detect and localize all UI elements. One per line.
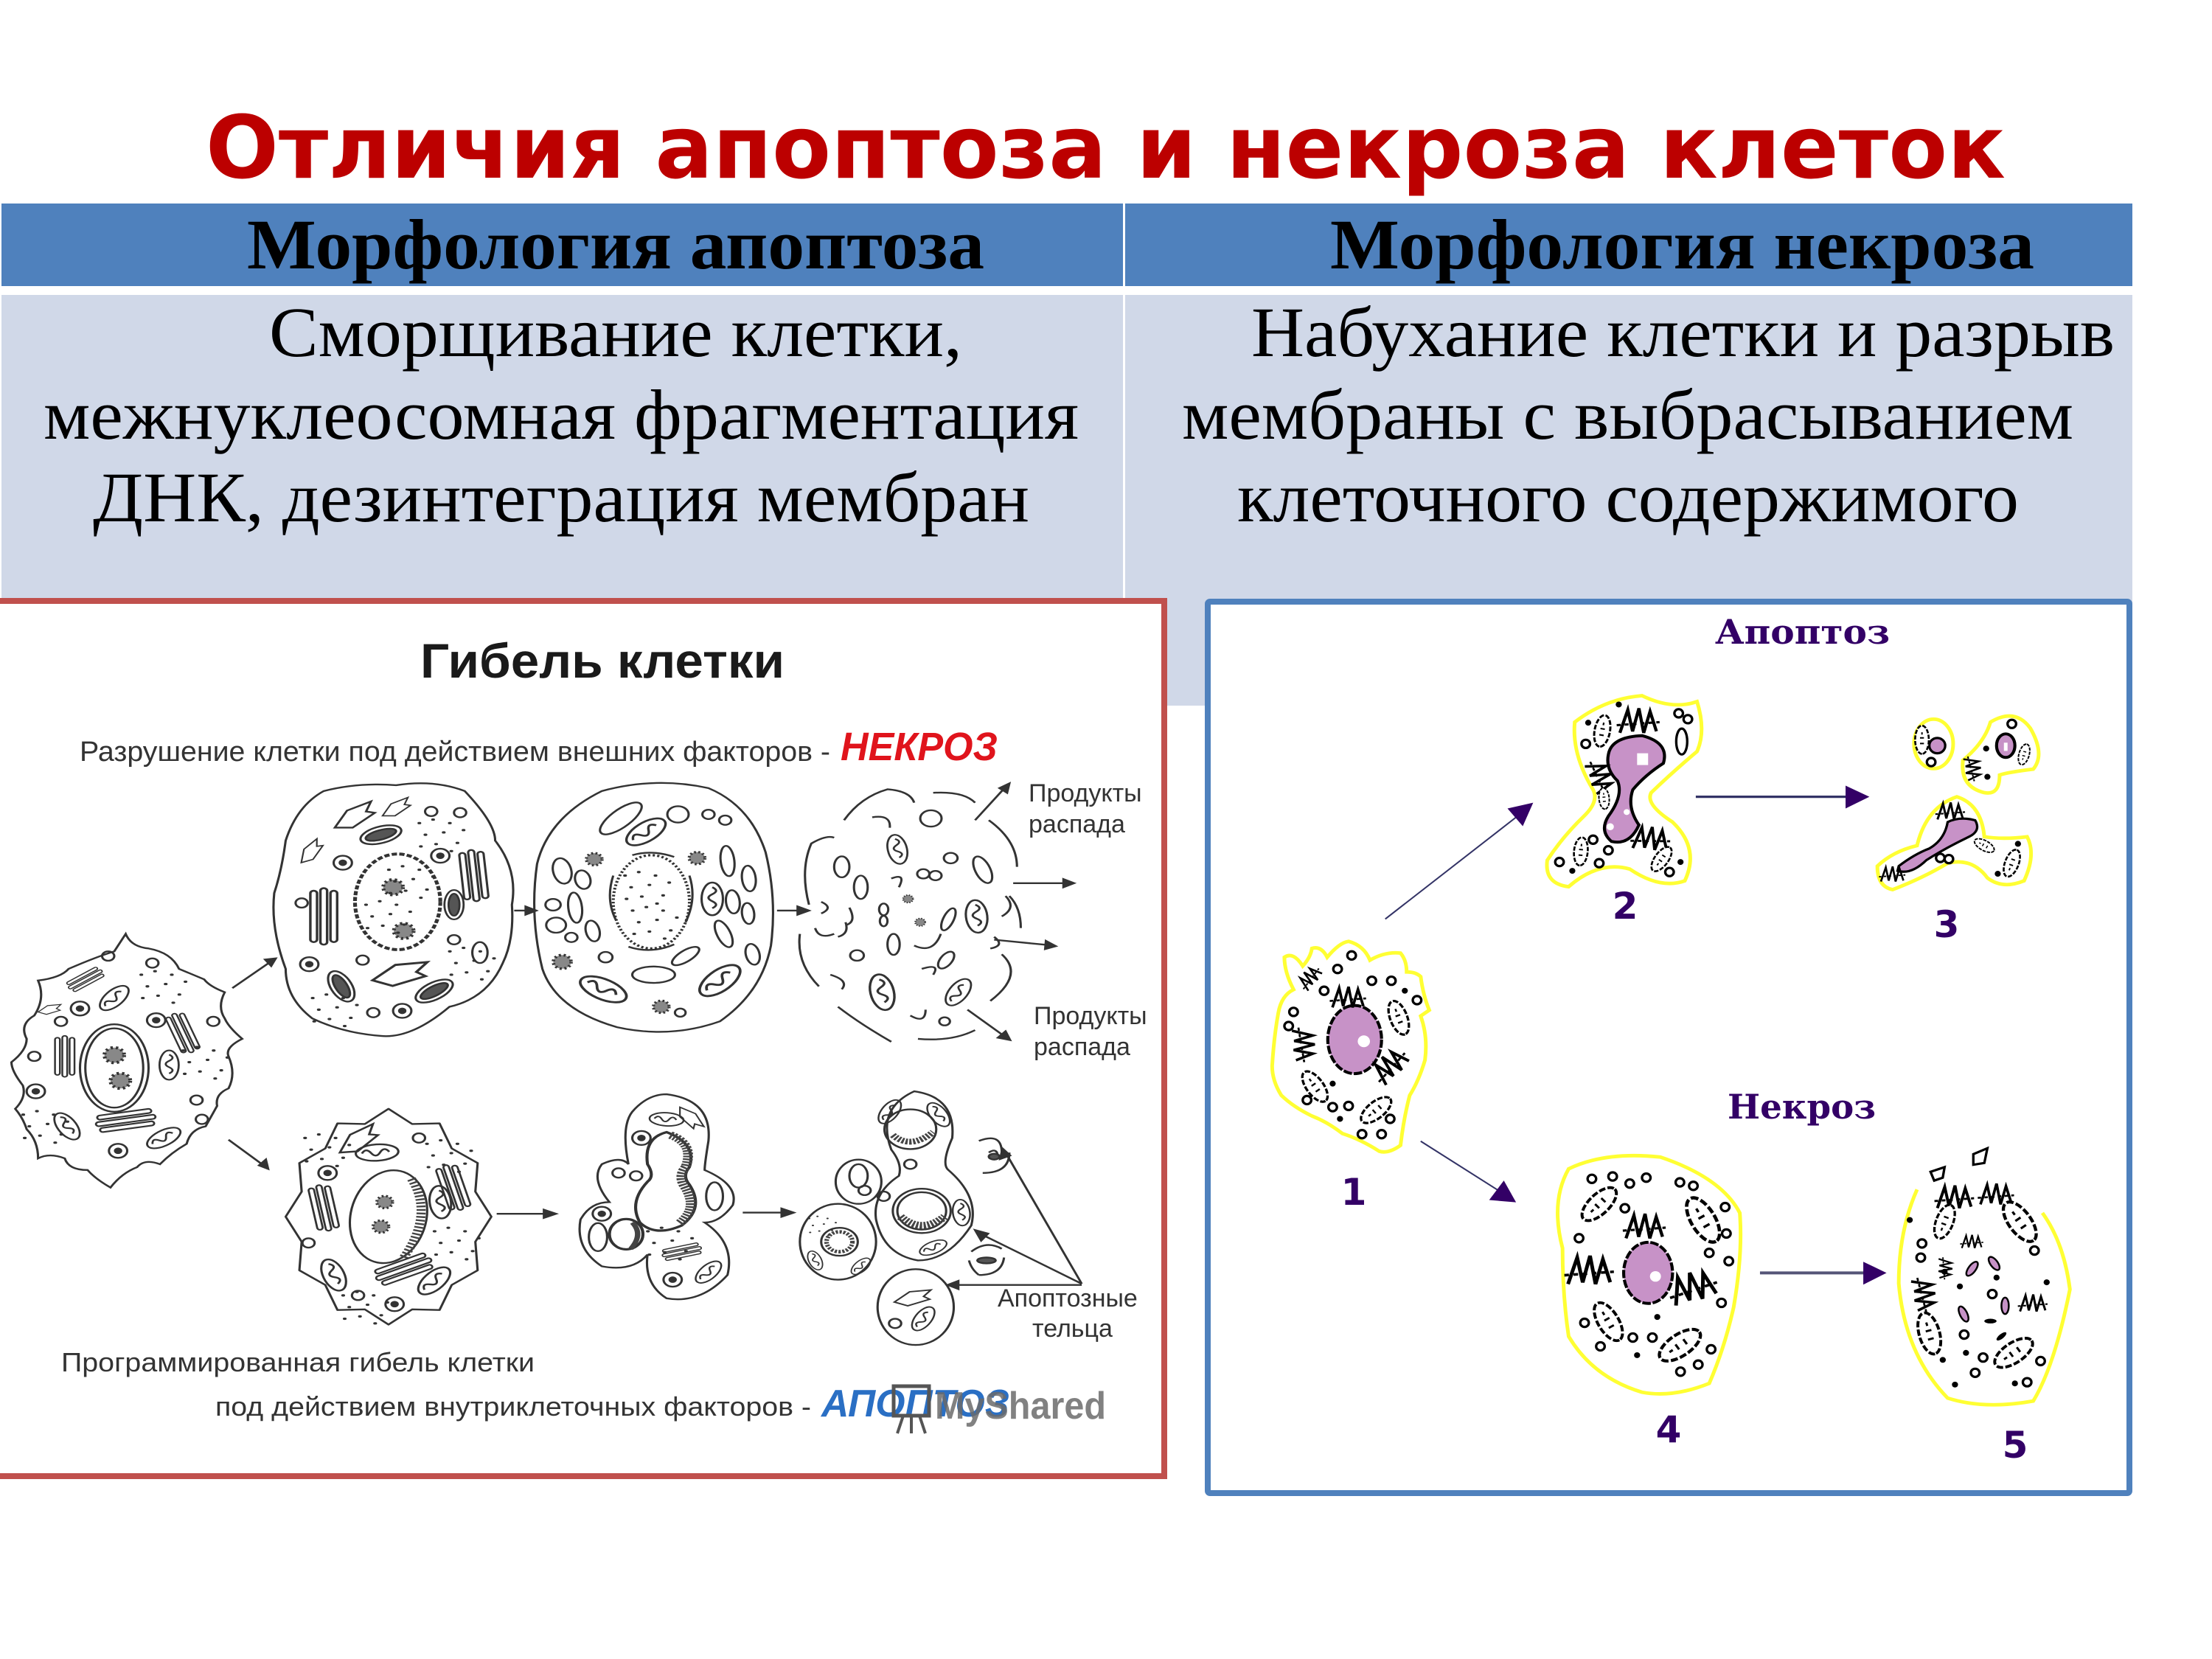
necrosis caption: Разрушение клетки под действием внешних факторов -: [80, 737, 830, 768]
panel heading: Гибель клетки: [420, 633, 785, 688]
watermark: [894, 1385, 1106, 1433]
panel frame: [1208, 602, 2129, 1493]
number 4: 4: [1656, 1408, 1681, 1451]
necrosis stage 2: round swollen cell: [535, 783, 773, 1032]
table body: necrosis description: [1125, 293, 2132, 706]
label: decay products top: Продукты: [1029, 779, 1142, 807]
label: decay products top: распада: [1029, 810, 1125, 838]
comparison table: [1, 204, 2132, 706]
table body: necrosis description: клеточного содержимого: [1237, 458, 2019, 537]
table body: necrosis description: мембраны с выбрасыванием: [1182, 375, 2073, 454]
stage arrows: [1385, 785, 1887, 1284]
number 5: 5: [2003, 1424, 2028, 1467]
table body: apoptosis description: межнуклеосомная фрагментация: [44, 375, 1079, 454]
panel: apoptosis vs necrosis stages (blue frame): [1208, 602, 2129, 1493]
number 3: 3: [1934, 903, 1959, 946]
label: decay products bottom: Продукты: [1034, 1002, 1147, 1030]
table header: necrosis column: Морфология некроза: [1330, 205, 2034, 284]
label: apoptotic bodies: тельца: [1032, 1315, 1113, 1343]
necrosis stage 1: swollen cell: [274, 783, 513, 1036]
normal cell: [11, 934, 243, 1188]
cell illustrations and arrows: [1270, 694, 2072, 1407]
apoptosis stage 2: blebbing cell: [580, 1094, 734, 1299]
apoptosis label: АПОПТОЗ: [820, 1382, 1009, 1425]
apoptosis stage 1: shrinking cell: [285, 1109, 491, 1324]
cell 3: fragments: [1877, 716, 2039, 890]
cell illustrations, necrosis and apoptosis pathways: [10, 782, 1082, 1346]
panel frame: [0, 601, 1164, 1476]
cell 5: ruptured cell: [1899, 1148, 2070, 1405]
apoptosis caption line 1: Программированная гибель клетки: [61, 1347, 535, 1377]
watermark: MyShared: [935, 1385, 1106, 1427]
apoptosis caption line 2: под действием внутриклеточных факторов -: [215, 1391, 811, 1422]
table header: necrosis column: [1125, 204, 2132, 286]
table header: apoptosis column: Морфология апоптоза: [247, 205, 984, 284]
table body: necrosis description: Набухание клетки и разрыв: [1251, 293, 2115, 372]
necrosis label: НЕКРОЗ: [841, 725, 998, 769]
title: Отличия апоптоза и некроза клеток: [206, 97, 2006, 198]
pathway arrows: [229, 784, 1082, 1289]
cell 1: intact cell: [1272, 942, 1429, 1152]
label: necrosis: Некроз: [1728, 1087, 1876, 1127]
number 2: 2: [1613, 885, 1638, 928]
label: apoptotic bodies: Апоптозные: [998, 1284, 1138, 1312]
cell 4: swollen cell: [1558, 1155, 1741, 1394]
apoptosis stage 3: apoptotic bodies: [800, 1091, 1009, 1345]
number 1: 1: [1341, 1171, 1366, 1214]
panel: cell death diagram (red frame): [0, 601, 1164, 1476]
table body: apoptosis description: ДНК, дезинтеграция мембран: [93, 458, 1029, 537]
table header: apoptosis column: [1, 204, 1123, 286]
cell 2: constricting cell: [1547, 695, 1702, 887]
necrosis stage 3: ruptured cell: [799, 789, 1020, 1042]
table body: apoptosis description: [1, 293, 1123, 706]
label: decay products bottom: распада: [1034, 1033, 1130, 1061]
table body: apoptosis description: Сморщивание клетки,: [269, 293, 962, 372]
label: apoptosis: Апоптоз: [1715, 612, 1890, 652]
